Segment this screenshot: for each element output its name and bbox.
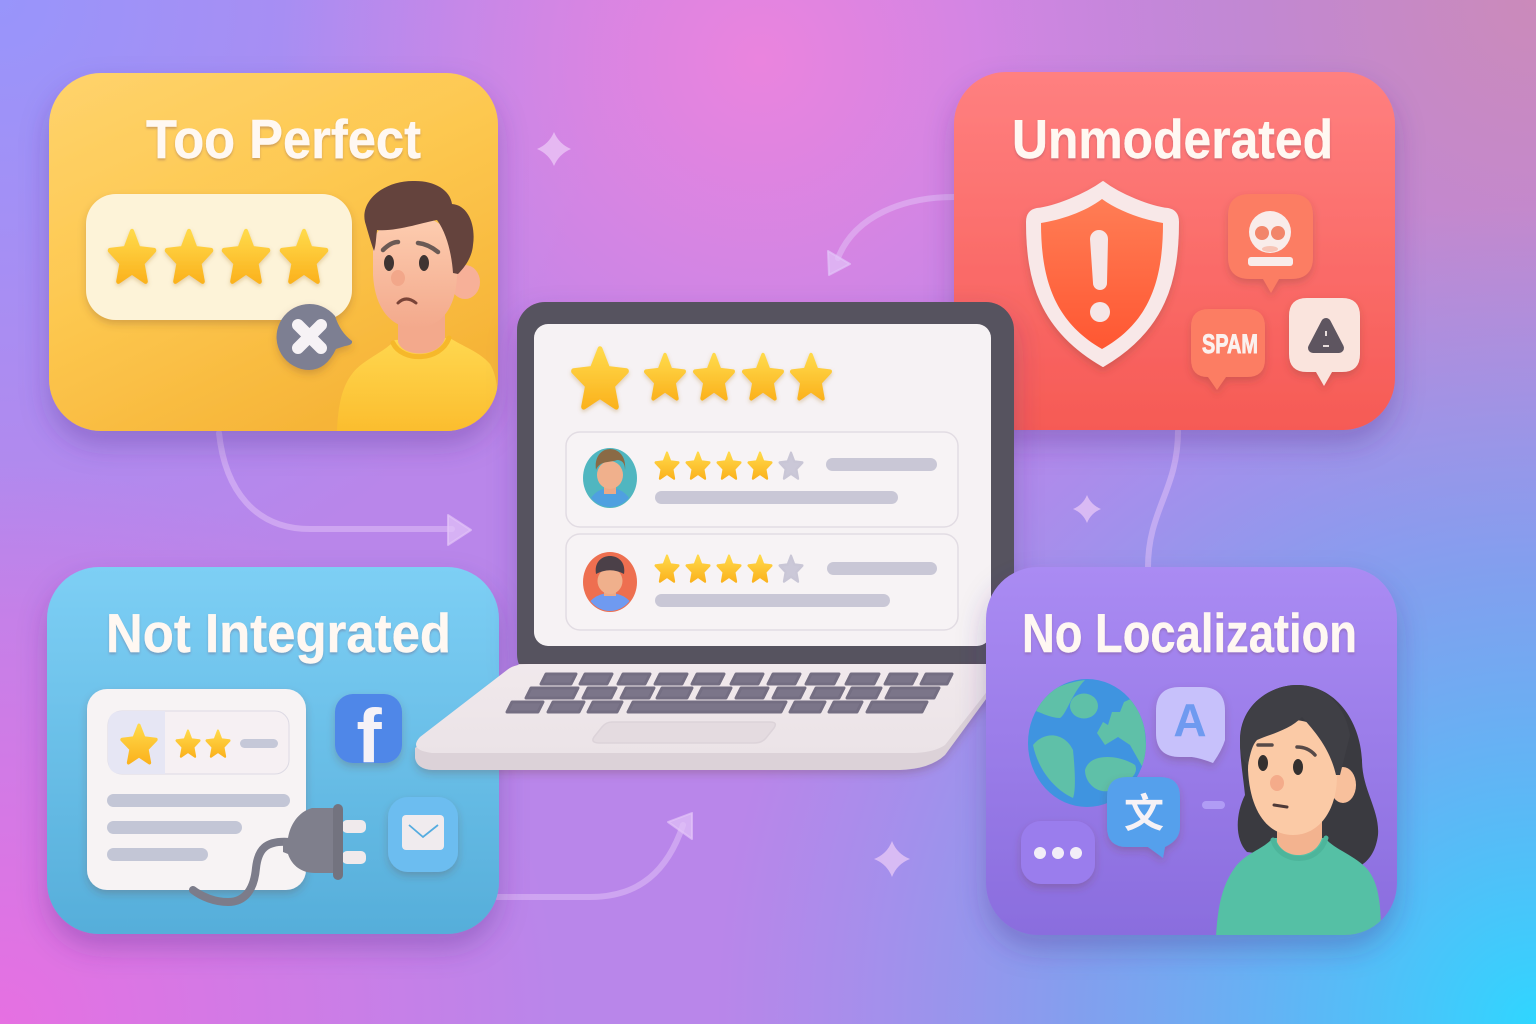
icon: translate speech bubble [1107, 777, 1180, 858]
heading: no localization: No Localization [1022, 602, 1357, 664]
avatar: person on orange [583, 552, 637, 612]
icon: spam speech bubble [1191, 309, 1265, 390]
small dash [1202, 801, 1225, 809]
icon: facebook [335, 694, 402, 779]
character: worried man [337, 181, 500, 432]
icon: skull speech bubble [1228, 194, 1313, 293]
heading: too perfect: Too Perfect [146, 108, 421, 170]
rating box with four stars [86, 194, 352, 320]
icon: letter A speech bubble: A [1173, 694, 1207, 746]
review card one [566, 432, 958, 528]
sparkle: bottom centre [874, 841, 910, 877]
stars four of five [656, 453, 802, 478]
icon: alert speech bubble [1289, 298, 1360, 386]
icon: unplugged cable [193, 804, 366, 902]
review card two [566, 534, 958, 631]
trackpad [593, 722, 775, 743]
panel: too perfect [49, 73, 500, 432]
keyboard keys [507, 674, 952, 712]
icon: facebook: f [356, 694, 382, 779]
panel: no localization [986, 567, 1397, 936]
arrow: unmoderated to no localization [1148, 431, 1178, 567]
panel: unmoderated [954, 72, 1395, 430]
stars four of five [656, 556, 802, 581]
icon: warning shield [1027, 182, 1178, 366]
laptop screen [534, 324, 991, 646]
arrow: too perfect to laptop [219, 433, 471, 545]
icon: rejected speech bubble [277, 304, 352, 370]
icon: typing dots bubble [1021, 821, 1095, 884]
character: confused woman [1216, 685, 1381, 936]
headline five-star rating [574, 349, 830, 407]
icon: translate speech bubble: 文 [1124, 781, 1164, 839]
heading: not integrated: Not Integrated [106, 602, 451, 664]
icon: letter A speech bubble [1156, 687, 1225, 763]
icon: spam speech bubble: SPAM [1202, 329, 1258, 359]
laptop with review screen [415, 302, 1014, 770]
panel: not integrated [47, 567, 499, 934]
review document [87, 689, 306, 890]
sparkle: top centre [537, 132, 571, 166]
laptop keyboard deck [415, 664, 1000, 770]
icon: globe [1028, 679, 1146, 807]
arrow: unmoderated to laptop [828, 197, 954, 275]
sparkle: right centre [1073, 495, 1101, 523]
laptop lid [517, 302, 1014, 682]
arrow: not integrated to laptop [497, 813, 692, 897]
heading: unmoderated: Unmoderated [1012, 108, 1333, 170]
avatar: man on teal [583, 448, 637, 508]
icon: email [388, 797, 458, 872]
